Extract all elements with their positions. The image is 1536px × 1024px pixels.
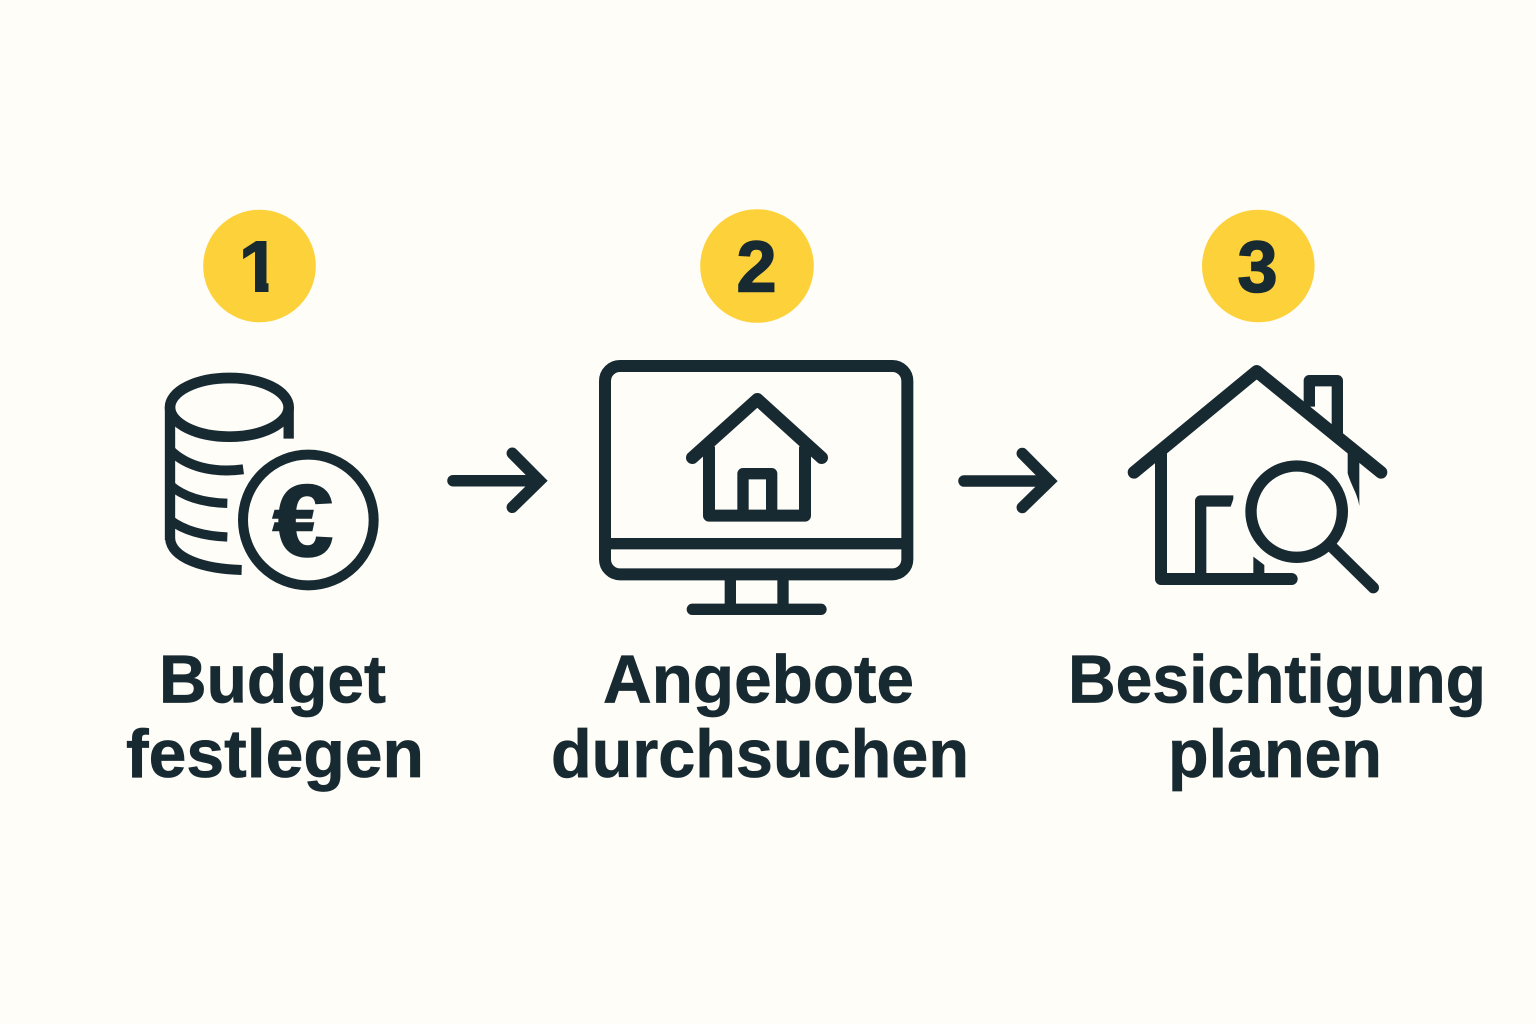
- number badge 2: 2: [736, 228, 777, 308]
- number badge 3: [1202, 210, 1315, 322]
- label: Besichtigung planen: [1068, 642, 1486, 792]
- label: Budget festlegen: festlegen: [126, 716, 424, 792]
- icon: coin stack with euro coin: [170, 378, 374, 585]
- infographic canvas: [126, 209, 1482, 792]
- label: Besichtigung planen: planen: [1168, 716, 1382, 792]
- step 2: listings: [551, 209, 969, 792]
- label: Angebote durchsuchen: durchsuchen: [551, 716, 969, 792]
- number badge 1: 1: [239, 228, 279, 308]
- arrow 2 to 3: [964, 454, 1050, 508]
- label: Budget festlegen: Budget: [159, 642, 386, 718]
- step 3: viewing: [1068, 210, 1486, 792]
- icon: house with magnifying glass: [1134, 371, 1381, 588]
- number badge 2: [700, 209, 814, 323]
- arrow 1 to 2: [453, 453, 540, 507]
- label: Angebote durchsuchen: [551, 642, 969, 792]
- number badge 3: 3: [1237, 228, 1278, 308]
- icon: monitor with house: [605, 366, 907, 609]
- icon: coin stack with euro coin: €: [272, 464, 334, 578]
- label: Budget festlegen: [126, 642, 424, 792]
- step 1: budget: [126, 210, 424, 792]
- label: Angebote durchsuchen: Angebote: [603, 642, 914, 718]
- label: Besichtigung planen: Besichtigung: [1068, 642, 1486, 718]
- number badge 1: [203, 210, 316, 322]
